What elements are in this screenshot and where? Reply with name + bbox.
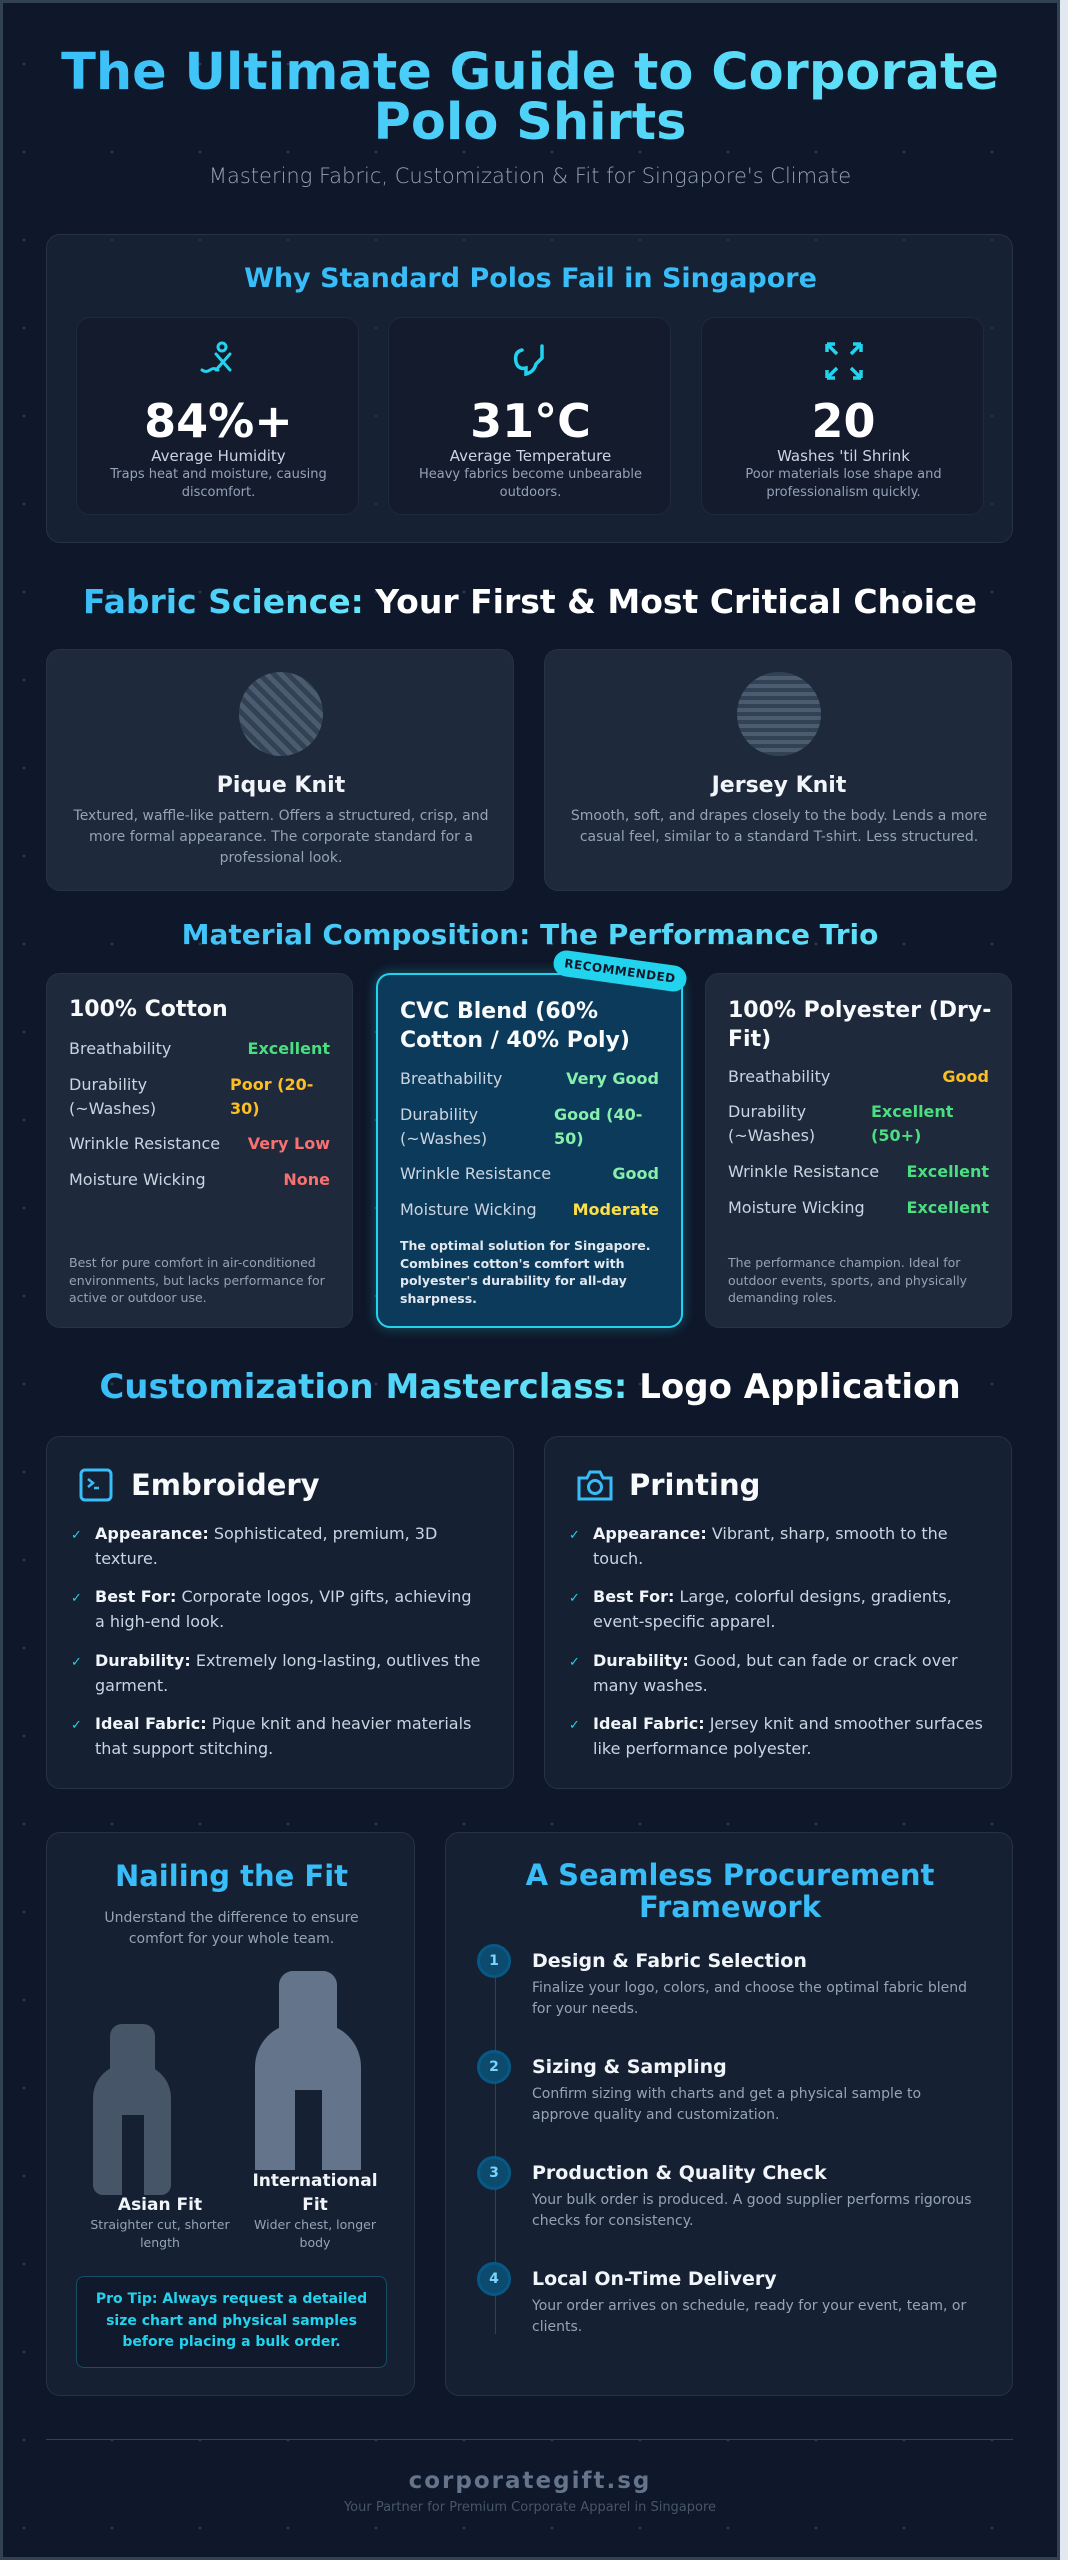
icon: pique swatch — [239, 672, 323, 756]
card: 100% cotton: Poor (20- — [230, 1075, 313, 1094]
card: 100% polyester: Breathability — [728, 1067, 830, 1086]
card: 100% cotton: Moisture Wicking — [69, 1170, 206, 1189]
card: embroidery: Durability: Extremely long-lasting, outlives the garment. — [95, 1651, 480, 1695]
panel: procurement framework: 2 — [489, 2059, 499, 2075]
badge: recommended — [552, 949, 688, 993]
panel: procurement framework: Framework — [639, 1890, 821, 1924]
card: 100% cotton: 100% Cotton — [69, 997, 228, 1022]
panel: procurement framework: 4 — [489, 2271, 499, 2287]
card: 100% cotton: Best for pure comfort in air-conditioned environments, but lacks performance for active or outdoor use. — [69, 1255, 325, 1305]
icon: humidity — [200, 342, 232, 373]
step 3 — [477, 2156, 972, 2229]
step 2: Sizing & Sampling — [532, 2056, 727, 2078]
step 3: Production & Quality Check — [532, 2162, 827, 2184]
card: CVC blend (recommended): Good (40- — [554, 1105, 642, 1124]
panel: nailing the fit: Straighter cut, shorter length — [90, 2217, 230, 2250]
footer: corporategift.sg — [409, 2468, 651, 2494]
subtitle: Mastering Fabric, Customization & Fit for Singapore's Climate — [209, 164, 851, 188]
stat card: humidity: Traps heat and moisture, causing discomfort. — [110, 467, 327, 500]
card: 100% polyester: Excellent — [907, 1162, 989, 1181]
title — [0, 48, 1060, 148]
card: 100% cotton: Wrinkle Resistance — [69, 1134, 220, 1153]
card: pique knit — [46, 649, 514, 891]
step 1 — [477, 1944, 967, 2017]
card: CVC blend (recommended): Durability — [400, 1105, 478, 1124]
step 4: Local On-Time Delivery — [532, 2268, 777, 2290]
card: jersey knit: Jersey Knit — [712, 773, 846, 798]
card: CVC blend (recommended): Good — [612, 1164, 659, 1183]
card: printing: Ideal Fabric: Jersey knit and smoother surfaces like performance polyester. — [593, 1714, 983, 1758]
stat card: humidity: Average Humidity — [151, 447, 286, 465]
step 4 — [477, 2262, 966, 2335]
stat card: washes — [701, 317, 984, 515]
card: embroidery: Embroidery — [131, 1468, 320, 1502]
icon: international fit figure — [255, 1971, 361, 2170]
callout: pro tip — [76, 2276, 387, 2368]
footer — [344, 2468, 716, 2515]
card: 100% polyester: Excellent — [907, 1198, 989, 1217]
badge: recommended: RECOMMENDED — [563, 956, 677, 986]
card: 100% polyester: Wrinkle Resistance — [728, 1162, 879, 1181]
card: 100% cotton: (~Washes) — [69, 1099, 156, 1118]
card: pique knit: Textured, waffle-like pattern. Offers a structured, crisp, and more formal appearance. The corporate standard for a professional look. — [74, 808, 488, 866]
timeline line — [495, 1961, 496, 2334]
card: CVC blend (recommended): Breathability — [400, 1069, 502, 1088]
footer: Your Partner for Premium Corporate Apparel in Singapore — [344, 2500, 716, 2515]
stat card: humidity — [76, 317, 359, 515]
card: 100% cotton: 30) — [230, 1099, 260, 1118]
panel: nailing the fit: Asian Fit — [118, 2195, 202, 2215]
icon: shrink arrows — [825, 342, 863, 380]
card: printing: Durability: Good, but can fade or crack over many washes. — [593, 1651, 958, 1695]
card: jersey knit — [544, 649, 1012, 891]
card: printing: Printing — [629, 1468, 760, 1502]
card: 100% polyester: The performance champion. Ideal for outdoor events, sports, and physically demanding roles. — [728, 1255, 967, 1305]
step 2: Confirm sizing with charts and get a physical sample to approve quality and customization. — [532, 2086, 921, 2123]
icon: embroidery — [80, 1468, 112, 1502]
card: 100% cotton: Durability — [69, 1075, 147, 1094]
card: CVC blend (recommended): The optimal solution for Singapore. Combines cotton's comfort with polyester's durability for all-day sharpness. — [400, 1238, 650, 1306]
stat card: washes: Washes 'til Shrink — [777, 447, 910, 465]
panel: nailing the fit: Understand the difference to ensure comfort for your whole team. — [104, 1910, 359, 1947]
card: 100% cotton: Excellent — [248, 1039, 330, 1058]
icon: camera — [578, 1470, 612, 1500]
card: printing: Appearance: Vibrant, sharp, smooth to the touch. — [593, 1524, 948, 1568]
card: 100% cotton: Very Low — [248, 1134, 330, 1153]
card: 100% polyester: (50+) — [871, 1126, 921, 1145]
heading: fabric science: Fabric Science: Your First & Most Critical Choice — [83, 582, 977, 621]
card: 100% polyester: 100% Polyester (Dry- — [728, 998, 991, 1023]
card: CVC blend (recommended): Very Good — [566, 1069, 659, 1088]
step 4: Your order arrives on schedule, ready for your event, team, or clients. — [532, 2298, 966, 2335]
card: CVC blend (recommended): Moisture Wicking — [400, 1200, 537, 1219]
stat: 84%+: 84%+ — [144, 394, 293, 448]
stat card: washes: Poor materials lose shape and professionalism quickly. — [745, 467, 942, 500]
card: CVC blend (recommended): Moderate — [573, 1200, 659, 1219]
panel: nailing the fit: Wider chest, longer body — [254, 2217, 376, 2250]
icon: temperature — [514, 344, 544, 376]
panel: procurement framework — [445, 1832, 1013, 2396]
card: CVC blend (recommended): Cotton / 40% Poly) — [400, 1028, 630, 1053]
card: CVC blend (recommended): 50) — [554, 1129, 584, 1148]
panel: procurement framework: 3 — [489, 2165, 499, 2181]
card: 100% polyester — [705, 973, 1012, 1328]
stat card: temperature — [388, 317, 671, 515]
heading: material composition: Material Composition: The Performance Trio — [182, 918, 878, 951]
card: embroidery: Best For: Corporate logos, VIP gifts, achieving a high-end look. — [95, 1587, 472, 1631]
panel: nailing the fit: Nailing the Fit — [115, 1859, 348, 1893]
card: CVC blend (recommended) — [376, 973, 683, 1328]
card: CVC blend (recommended): CVC Blend (60% — [400, 999, 598, 1024]
card: 100% polyester: Good — [942, 1067, 989, 1086]
card: CVC blend (recommended): Wrinkle Resistance — [400, 1164, 551, 1183]
callout: pro tip: Pro Tip: Always request a detailed size chart and physical samples before placing a bulk order. — [96, 2291, 367, 2350]
step 3: Your bulk order is produced. A good supplier performs rigorous checks for consistency. — [532, 2192, 972, 2229]
stat: 20: 20 — [811, 394, 876, 448]
panel: nailing the fit: International Fit — [252, 2171, 378, 2215]
card: 100% polyester: (~Washes) — [728, 1126, 815, 1145]
card: 100% polyester: Moisture Wicking — [728, 1198, 865, 1217]
card: 100% cotton: Breathability — [69, 1039, 171, 1058]
card: embroidery — [46, 1436, 514, 1789]
step 1: Design & Fabric Selection — [532, 1950, 807, 1972]
card: printing — [544, 1436, 1012, 1789]
card: 100% polyester: Excellent — [871, 1102, 953, 1121]
card: 100% cotton — [46, 973, 353, 1328]
card: embroidery: Ideal Fabric: Pique knit and heavier materials that support stitching. — [95, 1714, 471, 1758]
heading: material composition — [0, 918, 1060, 952]
card: jersey knit: Smooth, soft, and drapes closely to the body. Lends a more casual feel, similar to a standard T-shirt. Less structured. — [571, 808, 987, 845]
card: 100% polyester: Durability — [728, 1102, 806, 1121]
stat card: temperature: Average Temperature — [450, 447, 611, 465]
step 2 — [477, 2050, 921, 2123]
stat card: temperature: Heavy fabrics become unbearable outdoors. — [419, 467, 642, 500]
card: 100% polyester: Fit) — [728, 1027, 771, 1052]
card: pique knit: Pique Knit — [217, 773, 345, 798]
heading: customization masterclass: Customization Masterclass: Logo Application — [99, 1367, 961, 1407]
step 1: Finalize your logo, colors, and choose the optimal fabric blend for your needs. — [532, 1980, 967, 2017]
panel: procurement framework: 1 — [489, 1953, 499, 1969]
card: CVC blend (recommended): (~Washes) — [400, 1129, 487, 1148]
stat: 31°C: 31°C — [470, 394, 591, 448]
icon: jersey swatch — [737, 672, 821, 756]
heading: why polos fail: Why Standard Polos Fail in Singapore — [244, 263, 817, 294]
title: The Ultimate Guide to Corporate — [61, 43, 999, 102]
title: Polo Shirts — [373, 93, 687, 152]
panel: nailing the fit — [46, 1832, 415, 2396]
card: printing: Best For: Large, colorful designs, gradients, event-specific apparel. — [593, 1587, 952, 1631]
card: 100% cotton: None — [283, 1170, 330, 1189]
card: embroidery: Appearance: Sophisticated, premium, 3D texture. — [95, 1524, 437, 1568]
panel: procurement framework: A Seamless Procurement — [526, 1858, 934, 1892]
panel: why standard polos fail — [46, 234, 1013, 543]
icon: asian fit figure — [93, 2024, 171, 2195]
